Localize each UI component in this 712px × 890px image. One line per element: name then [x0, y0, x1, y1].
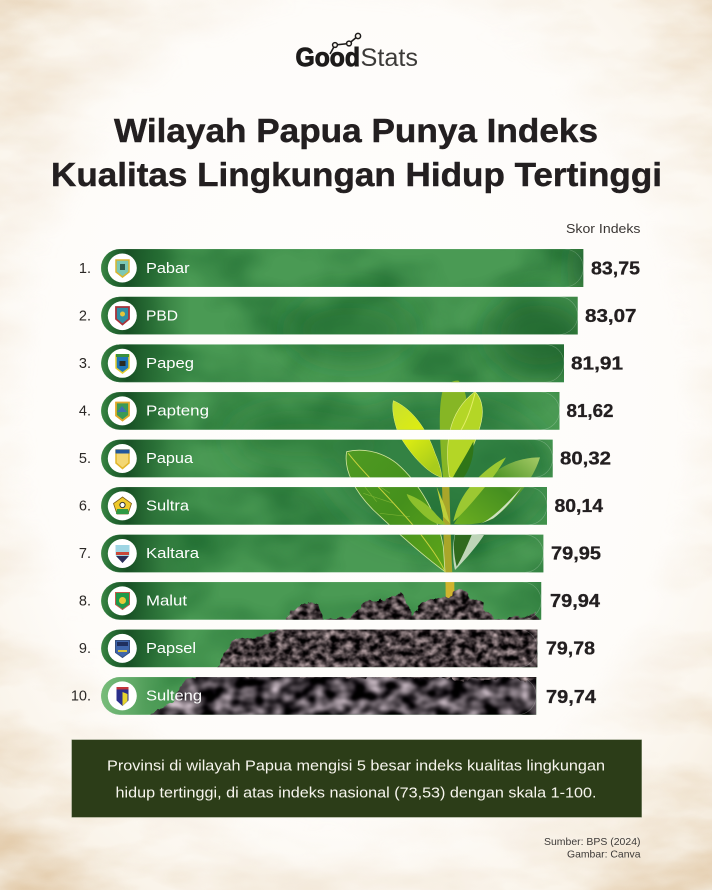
row 4: Papteng: 4.	[79, 404, 91, 420]
photo fill: seedling in soil seen through the bars	[95, 239, 604, 721]
row 7: Kaltara: Kaltara	[146, 545, 200, 562]
row 3: Papeg: 3.	[79, 356, 91, 372]
source note: Sumber: BPS (2024)	[544, 836, 640, 848]
logo: GoodStats	[296, 33, 418, 72]
title	[51, 112, 662, 193]
emblem: Papsel	[108, 634, 137, 663]
row 9: Papsel: Papsel	[146, 640, 196, 657]
seedling	[346, 381, 540, 603]
row 5: Papua: 80,32	[560, 448, 611, 468]
row 3: Papeg	[79, 344, 623, 382]
callout: summary note: Provinsi di wilayah Papua mengisi 5 besar indeks kualitas lingkungan	[107, 758, 605, 774]
emblem: Papeg	[108, 349, 137, 378]
title: Kualitas Lingkungan Hidup Tertinggi	[51, 156, 662, 193]
row 8: Malut: Malut	[146, 592, 188, 610]
row 7: Kaltara: 79,95	[551, 544, 601, 564]
row 1: Pabar: 1.	[79, 261, 91, 277]
row 6: Sultra: 80,14	[554, 496, 603, 516]
logo: GoodStats: Good	[296, 42, 360, 72]
row 10: Sulteng: Sulteng	[146, 688, 202, 704]
row 5: Papua	[79, 440, 611, 477]
emblem: Sulteng	[108, 681, 137, 710]
row 10: Sulteng: 79,74	[546, 687, 596, 707]
row 8: Malut	[79, 582, 600, 620]
source note	[544, 836, 641, 860]
title: Wilayah Papua Punya Indeks	[114, 112, 598, 149]
emblem: Papteng	[108, 396, 137, 425]
row 8: Malut: 8.	[79, 594, 91, 610]
row 10: Sulteng: 10.	[71, 688, 91, 704]
row 5: Papua: Papua	[146, 450, 194, 467]
emblem: Papua	[108, 444, 137, 473]
row 8: Malut: 79,94	[550, 591, 600, 611]
row 9: Papsel	[79, 630, 595, 667]
callout: summary note	[72, 740, 642, 817]
logo: GoodStats: Stats	[360, 44, 418, 72]
row 7: Kaltara	[79, 535, 601, 572]
emblem: Malut	[108, 586, 137, 615]
emblem: PBD	[108, 301, 137, 330]
source note: Gambar: Canva	[567, 848, 641, 860]
bar chart: provinces ranked by index score	[71, 239, 640, 721]
soil	[150, 677, 536, 715]
row 6: Sultra: 6.	[79, 498, 91, 514]
row 1: Pabar: 83,75	[591, 258, 640, 278]
callout: summary note: hidup tertinggi, di atas indeks nasional (73,53) dengan skala 1-100.	[116, 785, 596, 802]
row 2: PBD: 2.	[79, 308, 91, 324]
row 4: Papteng	[79, 392, 614, 430]
row 3: Papeg: Papeg	[146, 355, 194, 372]
emblem: Pabar	[108, 254, 137, 282]
emblem: Sultra	[108, 491, 137, 520]
row 6: Sultra	[79, 487, 603, 525]
row 9: Papsel: 9.	[79, 641, 91, 657]
column heading: Skor Indeks: Skor Indeks	[566, 221, 641, 236]
row 2: PBD: PBD	[146, 308, 178, 324]
row 2: PBD	[79, 297, 636, 334]
emblem: Kaltara	[108, 539, 137, 568]
row 7: Kaltara: 7.	[79, 546, 91, 562]
row 1: Pabar	[79, 249, 640, 287]
row 3: Papeg: 81,91	[571, 354, 623, 374]
row 1: Pabar: Pabar	[146, 260, 190, 277]
row 9: Papsel: 79,78	[546, 638, 595, 658]
row 4: Papteng: 81,62	[566, 401, 614, 421]
row 2: PBD: 83,07	[585, 306, 636, 326]
row 5: Papua: 5.	[79, 451, 91, 467]
row 6: Sultra: Sultra	[146, 498, 190, 514]
row 4: Papteng: Papteng	[146, 402, 209, 420]
row 10: Sulteng	[71, 677, 596, 715]
